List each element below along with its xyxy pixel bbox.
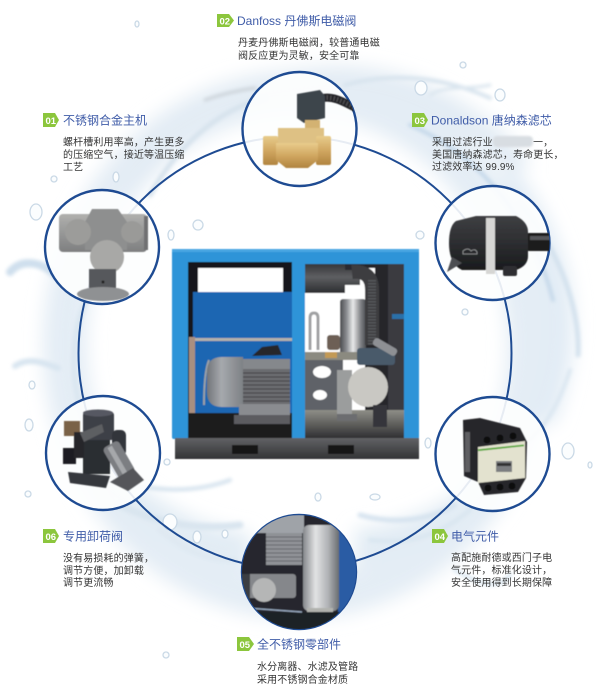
badge 01: 01 <box>46 116 57 127</box>
description 02 <box>238 36 380 62</box>
right bay <box>305 264 404 438</box>
tank and hose <box>340 299 366 355</box>
heading 03: Donaldson 唐纳森滤芯 <box>431 112 552 128</box>
photo circle 03: air filter <box>436 186 552 300</box>
pipes <box>310 313 318 350</box>
photo circle 05: stainless interior <box>240 515 360 632</box>
description 03: 美国唐纳森滤芯，寿命更长， <box>432 148 564 161</box>
frame <box>172 249 419 439</box>
badge 03 <box>412 113 428 127</box>
description 03: 一， <box>533 138 553 148</box>
description 04: 气元件，标准化设计， <box>451 564 552 576</box>
badge 01 <box>43 113 59 127</box>
motor <box>204 360 209 405</box>
heading 06: 专用卸荷阀 <box>63 528 123 544</box>
photo circle 02: solenoid valve <box>242 72 360 186</box>
item 06: unloading valve <box>43 528 154 589</box>
item 05: stainless parts <box>237 636 358 686</box>
item 02: Danfoss valve <box>217 13 380 62</box>
heading 01: 不锈钢合金主机 <box>63 112 147 128</box>
badge 02 <box>217 14 234 28</box>
description 06 <box>63 552 154 589</box>
description 05 <box>257 660 358 686</box>
description 03: 采用过滤行业 <box>432 136 493 148</box>
badge 02: 02 <box>220 16 230 28</box>
item 04: electrical components <box>432 528 552 589</box>
description 01: 螺杆槽利用率高，产生更多 <box>63 136 185 148</box>
description 05: 采用不锈钢合金材质 <box>257 673 348 686</box>
badge 03: 03 <box>414 116 425 127</box>
heading 05: 全不锈钢零部件 <box>257 636 341 652</box>
description 01 <box>63 136 185 174</box>
description 06: 没有易损耗的弹簧， <box>63 552 154 564</box>
photo circle 01: screw air end <box>45 190 159 304</box>
connecting ring <box>78 136 512 570</box>
badge 04: 04 <box>434 532 446 543</box>
description 03: 过滤效率达 99.9% <box>432 160 515 173</box>
photo circle 06: unloading valve <box>46 396 160 510</box>
description 01: 工艺 <box>63 162 83 174</box>
description 06: 调节方便，加卸载 <box>63 564 144 577</box>
badge 06: 06 <box>46 532 56 543</box>
screw unit <box>305 360 343 410</box>
description 06: 调节更流畅 <box>63 576 114 589</box>
description 02: 丹麦丹佛斯电磁阀，较普通电磁 <box>238 36 380 49</box>
badge 05: 05 <box>240 640 251 651</box>
heading 02: Danfoss 丹佛斯电磁阀 <box>237 13 356 28</box>
compressor machine <box>172 249 419 459</box>
description 01: 的压缩空气，接近等温压缩 <box>63 148 185 161</box>
base <box>175 438 419 459</box>
description 04: 高配施耐德或西门子电 <box>451 551 552 564</box>
description 04: 安全使用得到长期保障 <box>451 576 552 589</box>
description 04 <box>451 551 552 589</box>
blurred redaction <box>493 136 533 147</box>
left bay <box>188 262 292 438</box>
item 01: screw main unit <box>43 112 185 174</box>
heading 04: 电气元件 <box>451 528 499 544</box>
description 03 <box>432 136 564 173</box>
description 02: 阀反应更为灵敏，安全可靠 <box>238 49 360 62</box>
photo circle 04: contactor <box>436 397 550 511</box>
item 03: Donaldson filter <box>412 112 564 173</box>
description 05: 水分离器、水滤及管路 <box>257 660 358 673</box>
